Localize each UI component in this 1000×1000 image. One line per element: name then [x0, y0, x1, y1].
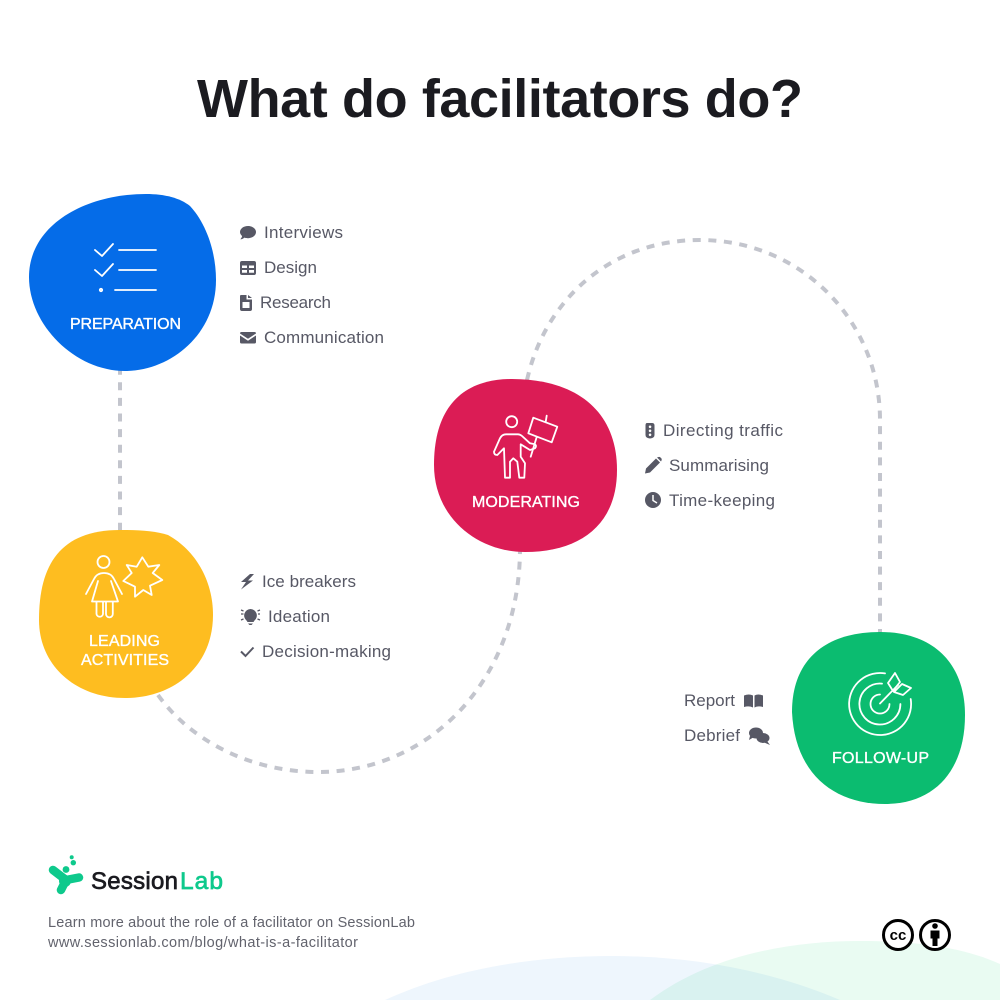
icon: person and star: [86, 556, 162, 617]
icon: chat bubbles: [749, 728, 770, 745]
label line 2: ACTIVITIES: [81, 652, 169, 669]
text: Ice breakers: Ice breakers: [262, 572, 356, 591]
label: leading activities: LEADING: [89, 633, 160, 650]
connector: preparation to leading activities: [118, 367, 122, 534]
text: Communication: Communication: [264, 328, 384, 347]
background wave: blue: [385, 956, 840, 1000]
title: What do facilitators do?: [197, 69, 803, 129]
text: Interviews: Interviews: [264, 223, 343, 242]
footer text: [47, 915, 415, 951]
text: Design: Design: [264, 258, 317, 277]
icon: check mark: [241, 648, 254, 656]
footer line 2: www.sessionlab.com/blog/what-is-a-facilitator: [47, 935, 358, 951]
logo mark: [53, 855, 79, 890]
label: preparation: PREPARATION: [70, 316, 181, 333]
icon: document: [240, 295, 252, 311]
label: moderating: MODERATING: [472, 494, 580, 511]
logo: SessionLab: [53, 855, 223, 895]
icon: checklist: [95, 244, 156, 291]
panel: leading activities: [39, 530, 213, 698]
list: preparation items: [240, 223, 384, 347]
connector: leading activities to moderating: [158, 548, 520, 772]
panel: moderating: [434, 379, 617, 552]
icon: open book: [744, 694, 763, 708]
icon: clock: [645, 492, 661, 508]
text: Report: Report: [684, 691, 735, 710]
footer line 1: Learn more about the role of a facilitator on SessionLab: [48, 915, 415, 931]
list: follow-up items: [684, 691, 770, 745]
icon: CC: cc: [890, 927, 906, 944]
icon: speech bubble: [240, 226, 256, 239]
text: Directing traffic: Directing traffic: [663, 421, 784, 440]
icon: envelope: [240, 332, 256, 344]
icon: light bulb: [241, 609, 260, 625]
text: Summarising: Summarising: [669, 456, 769, 475]
blob: moderating: [434, 379, 617, 552]
blob: preparation: [29, 194, 216, 371]
list: leading activities items: [241, 572, 391, 661]
text: Research: Research: [260, 293, 331, 312]
blob: leading activities: [39, 530, 213, 698]
text: Time-keeping: Time-keeping: [669, 491, 775, 510]
logo wordmark: Lab: Lab: [180, 868, 223, 895]
icon: attribution: [920, 920, 950, 950]
list: moderating items: [645, 421, 784, 510]
icon: creative commons badges: [884, 920, 950, 950]
icon: person with sign: [494, 416, 557, 478]
icon: table: [240, 261, 256, 275]
label: follow-up: FOLLOW-UP: [832, 750, 929, 767]
background wave: green: [650, 941, 1000, 1000]
panel: preparation: [29, 194, 216, 371]
connector: moderating to follow-up: [527, 240, 880, 636]
panel: follow-up: [792, 632, 965, 804]
icon: target with arrow: [849, 673, 911, 735]
blob: follow-up: [792, 632, 965, 804]
text: Ideation: Ideation: [268, 607, 330, 626]
icon: traffic light: [646, 423, 654, 438]
icon: pencil: [645, 457, 662, 474]
icon: lightning bolt: [241, 574, 254, 590]
logo wordmark: Session: [91, 868, 178, 895]
text: Decision-making: Decision-making: [262, 642, 391, 661]
text: Debrief: Debrief: [684, 726, 740, 745]
